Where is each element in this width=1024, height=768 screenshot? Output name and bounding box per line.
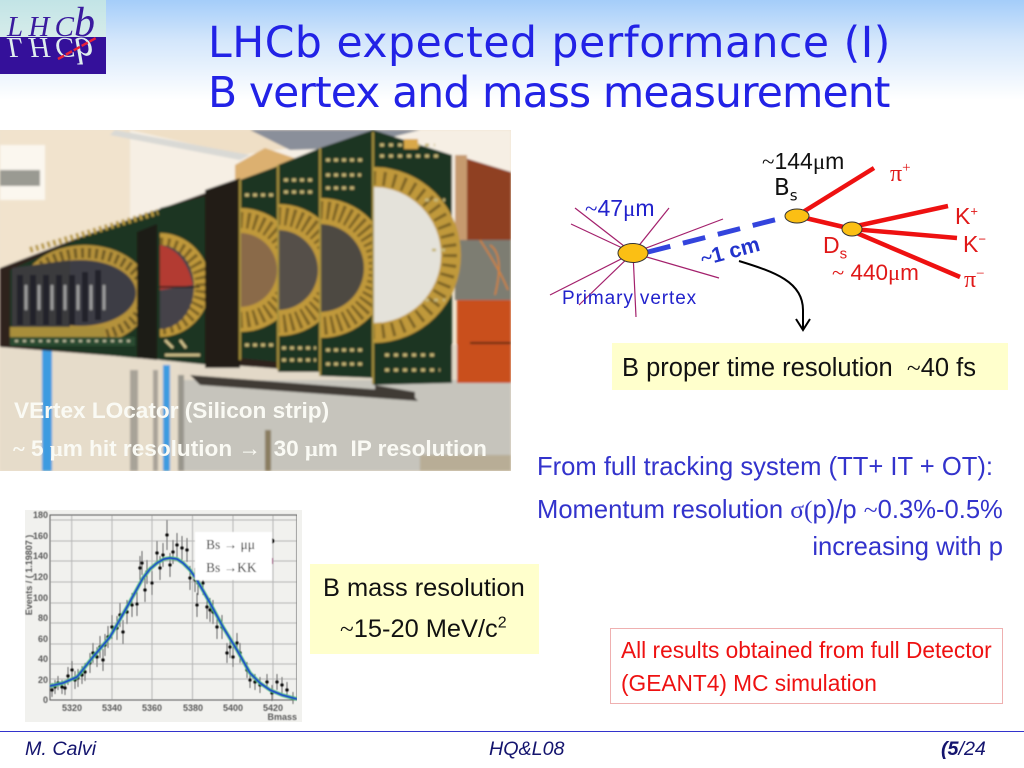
axis labels: 160 [33, 531, 48, 541]
flight length label: ~1 cm [698, 232, 762, 271]
logo: b [74, 0, 95, 46]
photo: VErtex LOcator [0, 130, 511, 471]
legend [195, 532, 272, 580]
callout: mass resolution: ~15-20 MeV/c2 [340, 615, 507, 643]
mass plot: 5380 [183, 703, 203, 713]
module B [320, 130, 373, 378]
fit curves [50, 558, 297, 699]
pi+: π+ [890, 160, 911, 187]
Ds vertex [842, 222, 862, 236]
grid [50, 515, 297, 700]
callout: proper time: B proper time resolution ~40 fs [622, 353, 976, 382]
callout: mass resolution: B mass resolution [323, 574, 525, 602]
axis labels: 120 [33, 572, 48, 582]
title: LHCb expected performance (I) [208, 19, 891, 68]
right panels [455, 155, 511, 240]
footer conference: HQ&L08 [489, 738, 565, 760]
mass plot: 5400 [223, 703, 243, 713]
primary vertex [618, 244, 648, 262]
logo: b [74, 29, 93, 71]
module E [160, 195, 210, 365]
axis labels: 20 [38, 675, 48, 685]
data points [50, 533, 295, 700]
note box [610, 628, 1003, 704]
144 um: ~144μm [762, 148, 844, 174]
text: increasing with p: increasing with p [812, 533, 1003, 561]
module C [278, 148, 320, 372]
small module stack [10, 208, 163, 360]
K-: K− [963, 231, 986, 257]
mass plot: Events / ( 1.19807 ) [24, 535, 34, 615]
Bs vertex [785, 209, 809, 223]
mass plot: 5360 [142, 703, 162, 713]
axis labels [33, 510, 48, 705]
K+: K+ [955, 203, 978, 229]
logo: LHC [6, 31, 75, 63]
axis labels: 140 [33, 551, 48, 561]
dark gap [137, 224, 157, 360]
axis labels: 0 [43, 695, 48, 705]
mass plot: Bmass [267, 712, 297, 722]
mass plot: 5420 [263, 703, 283, 713]
axis labels: 80 [38, 613, 48, 623]
Bs label: Bs [774, 175, 798, 205]
Ds label: Ds [823, 232, 847, 263]
arrow [739, 261, 810, 330]
axis labels: 60 [38, 634, 48, 644]
440 um: ~ 440μm [832, 260, 919, 285]
title: B vertex and mass measurement [208, 69, 890, 118]
flight path dashed [648, 218, 782, 252]
photo caption line 2: ~ 5 μm hit resolution → 30 μm IP resolution [13, 436, 487, 461]
photo caption: VErtex LOcator (Silicon strip) [14, 398, 329, 423]
note box: (GEANT4) MC simulation [621, 670, 877, 696]
text: tracking: From full tracking system (TT+ IT + OT): [537, 453, 993, 481]
footer rule [0, 731, 1024, 732]
callout: proper time [612, 343, 1008, 390]
primary vertex tracks [550, 208, 723, 317]
decay tracks [797, 168, 960, 277]
callout: mass resolution [310, 564, 539, 654]
axis labels: 180 [33, 510, 48, 520]
dark frame [0, 135, 370, 376]
error bars [52, 520, 293, 704]
mass plot [25, 510, 302, 722]
mass plot: 5320 [62, 703, 82, 713]
footer page number: (5/24 [941, 738, 986, 760]
primary vertex label: Primary vertex [562, 288, 697, 309]
axis labels: 40 [38, 654, 48, 664]
footer author: M. Calvi [25, 738, 96, 760]
47 um: ~47μm [585, 195, 655, 221]
legend: Bs →KK [206, 560, 257, 575]
module D [240, 166, 278, 362]
module A [373, 130, 452, 385]
legend dots [270, 538, 274, 544]
legend: Bs → μμ [206, 537, 255, 552]
logo [0, 0, 106, 74]
note box: All results obtained from full Detector [621, 637, 992, 663]
axis labels: 100 [33, 593, 48, 603]
frame [50, 515, 297, 700]
logo: LHC [6, 11, 75, 43]
text: momentum resolution: Momentum resolution σ(p)/p ~0.3%-0.5% [537, 495, 1003, 524]
pi-: π− [964, 266, 985, 293]
title [208, 19, 891, 118]
mass plot: 5340 [102, 703, 122, 713]
